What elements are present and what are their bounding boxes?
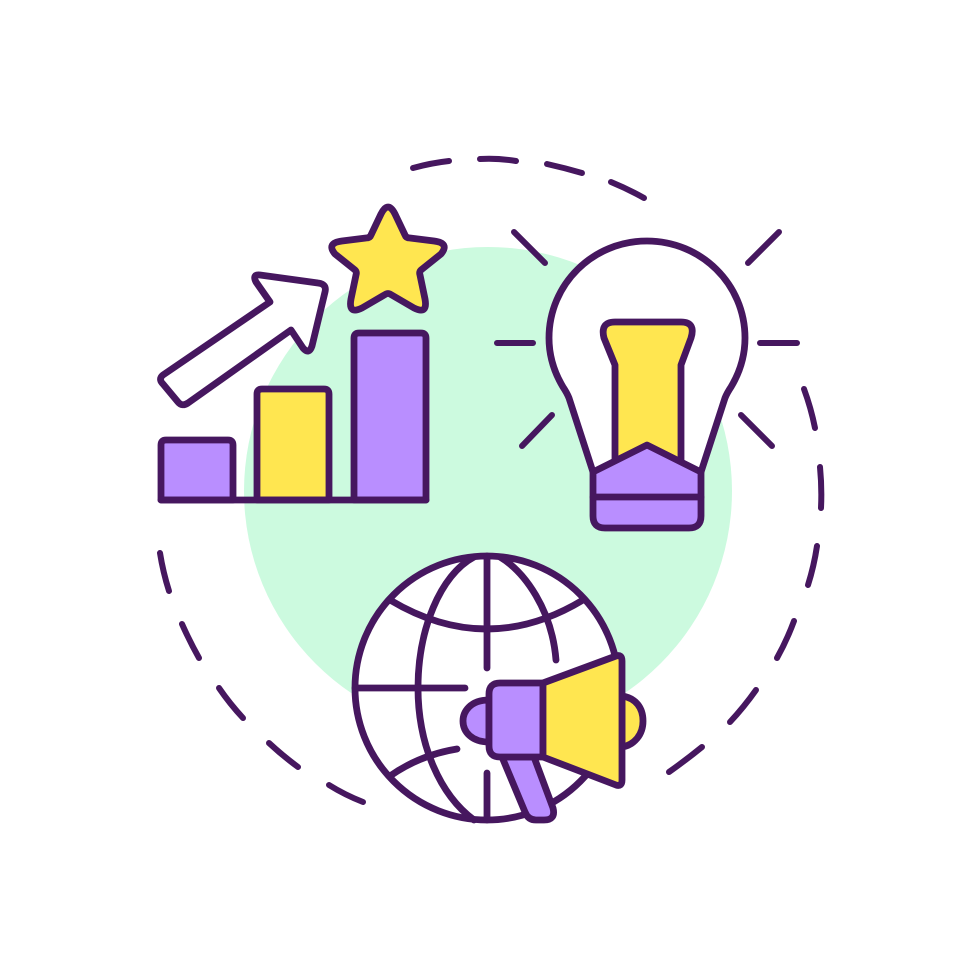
chart bars [161,333,426,500]
dashed outer ring [160,159,821,802]
globe [355,556,619,820]
filament [603,322,692,460]
bulb glass [549,241,745,472]
bulb base [593,445,701,528]
bar chart with arrow and star [160,207,444,500]
growth arrow [160,275,325,405]
megaphone [463,656,643,820]
rays [497,232,797,446]
light bulb with rays [497,232,797,528]
background mint circle [244,247,732,735]
globe with megaphone [355,556,643,820]
star [332,207,444,310]
